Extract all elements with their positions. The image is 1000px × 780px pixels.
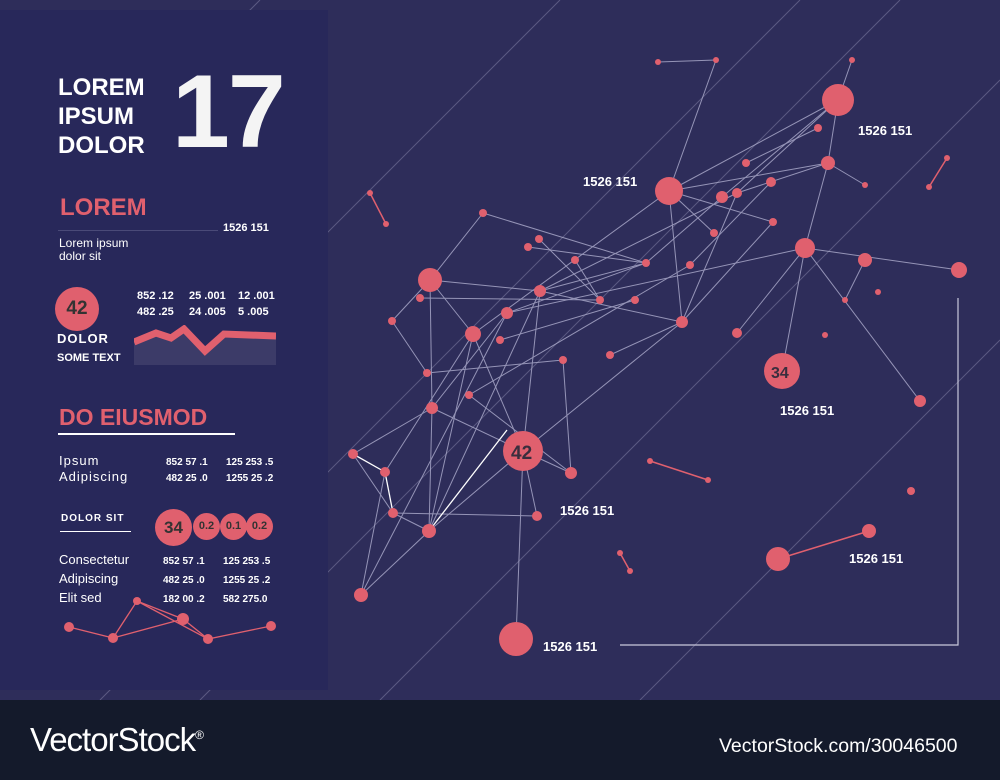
left panel: dolor sit — [59, 249, 101, 263]
node labels: 42 — [511, 443, 532, 464]
network nodes — [348, 57, 967, 656]
badges: 34 — [164, 518, 183, 537]
node labels: 1526 151 — [543, 639, 597, 654]
node labels: 1526 151 — [858, 123, 912, 138]
line chart — [64, 597, 276, 644]
left panel: 1255 25 .2 — [226, 473, 273, 484]
left panel: 25 .001 — [189, 290, 226, 302]
left panel: Ipsum — [59, 453, 99, 468]
left panel: 482 25 .0 — [166, 473, 208, 484]
left panel: 5 .005 — [238, 306, 269, 318]
left panel: 1255 25 .2 — [223, 575, 270, 586]
footer bar — [0, 700, 1000, 780]
title: IPSUM — [58, 103, 134, 130]
node labels: 34 — [771, 365, 789, 382]
left panel: DOLOR SIT — [61, 513, 124, 524]
left panel: DOLOR — [57, 331, 109, 346]
node labels — [511, 123, 912, 654]
title: LOREM — [58, 74, 145, 101]
heading lorem: LOREM — [60, 194, 147, 221]
stats grid: 852 .12 — [137, 290, 174, 302]
title: DOLOR — [58, 132, 145, 159]
heading do eiusmod: DO EIUSMOD — [59, 404, 207, 430]
left panel: Elit sed — [59, 590, 102, 605]
badge 42 — [55, 287, 99, 331]
left panel: 0.2 — [199, 520, 214, 532]
stats grid — [137, 290, 174, 318]
node labels: 1526 151 — [560, 503, 614, 518]
left panel: 24 .005 — [189, 306, 226, 318]
badges — [155, 509, 192, 546]
area chart — [134, 325, 276, 365]
left panel: 582 275.0 — [223, 594, 268, 605]
stats grid: 482 .25 — [137, 306, 174, 318]
left panel — [0, 10, 328, 690]
left panel: Lorem ipsum — [59, 236, 128, 250]
frame bracket — [620, 298, 958, 645]
left panel: 482 25 .0 — [163, 575, 205, 586]
node labels: 1526 151 — [780, 403, 834, 418]
left panel: Adipiscing — [59, 571, 118, 586]
title — [58, 74, 145, 159]
footer bar: VectorStock® — [30, 721, 203, 758]
left panel: 12 .001 — [238, 290, 275, 302]
left panel: 125 253 .5 — [226, 457, 273, 468]
left panel: 0.2 — [252, 520, 267, 532]
left panel: 852 57 .1 — [166, 457, 208, 468]
big number 17: 17 — [172, 54, 284, 170]
left panel: SOME TEXT — [57, 352, 121, 364]
left panel: Consectetur — [59, 552, 129, 567]
left panel: 0.1 — [226, 520, 241, 532]
network edges — [353, 60, 959, 639]
left panel: 125 253 .5 — [223, 556, 270, 567]
node labels: 1526 151 — [583, 174, 637, 189]
node labels: 1526 151 — [849, 551, 903, 566]
badge 42: 42 — [66, 298, 88, 319]
left panel: 852 57 .1 — [163, 556, 205, 567]
left panel: 1526 151 — [223, 222, 269, 234]
left panel: 182 00 .2 — [163, 594, 205, 605]
footer bar: VectorStock.com/30046500 — [719, 735, 958, 757]
left panel: Adipiscing — [59, 469, 128, 484]
